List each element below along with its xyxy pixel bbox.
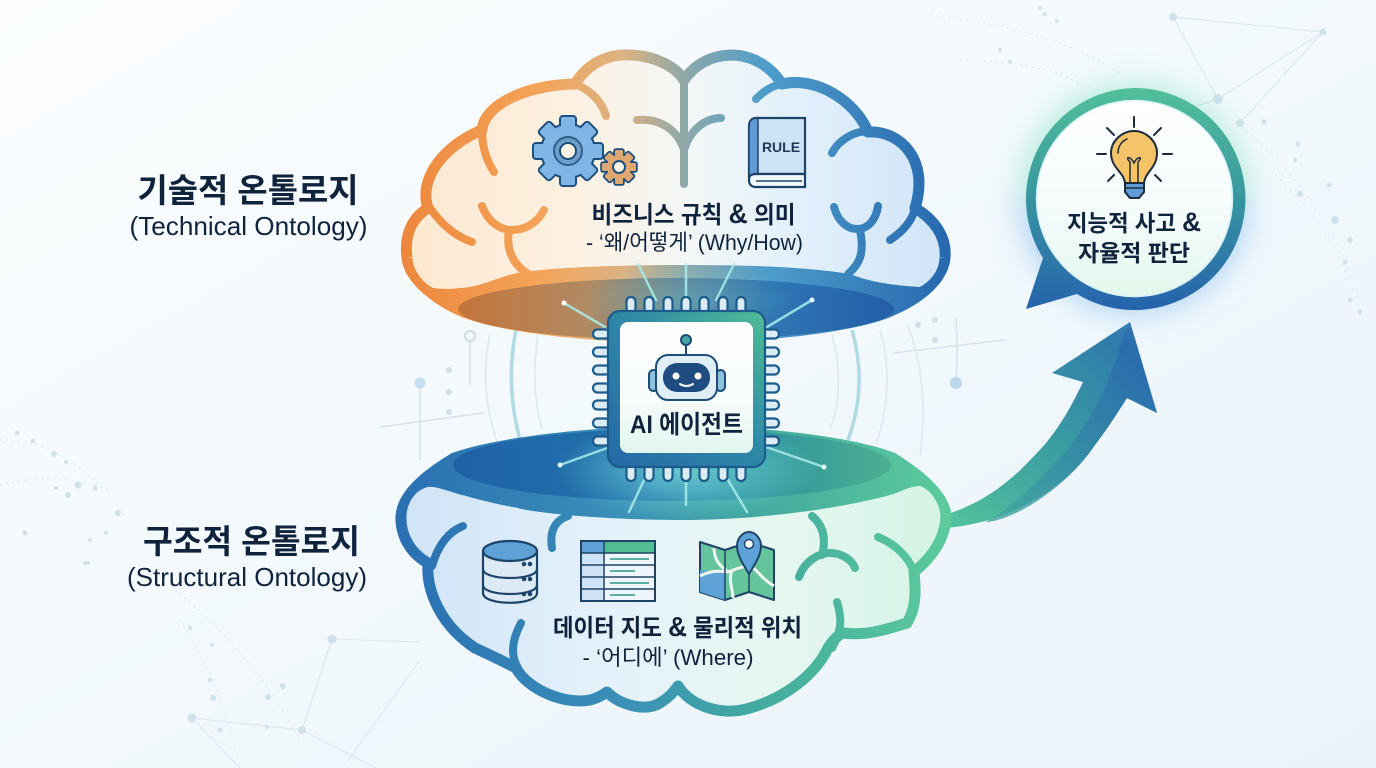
brain folds — [430, 80, 915, 274]
text: data map: - ‘어디에’ (Where) — [582, 645, 754, 670]
heading: technical ontology: 기술적 온톨로지 — [138, 172, 358, 209]
text: business rules — [586, 198, 803, 255]
energy glow and rays — [556, 264, 826, 520]
icon: light bulb — [1097, 117, 1172, 198]
cloud fill — [402, 482, 944, 711]
icon: data table — [581, 541, 655, 601]
cloud folds — [432, 516, 914, 668]
panel: structural ontology cloud — [396, 426, 952, 711]
text: business rules: 비즈니스 규칙 & 의미 — [592, 198, 795, 229]
rim — [396, 426, 952, 520]
text: business rules: - ‘왜/어떻게’ (Why/How) — [586, 230, 803, 255]
cloud outline — [401, 515, 946, 711]
chip: AI agent — [593, 297, 779, 481]
heading: structural ontology — [127, 523, 367, 592]
bubble — [1026, 88, 1245, 310]
brain outline — [406, 55, 945, 258]
icon: rule book: RULE — [762, 139, 800, 155]
rim — [402, 258, 950, 343]
chip pins — [593, 297, 779, 481]
callout: intelligent thinking: 자율적 판단 — [1078, 240, 1190, 266]
chip body — [608, 311, 765, 467]
icon: database — [483, 541, 537, 603]
text: data map: 데이터 지도 & 물리적 위치 — [553, 611, 802, 642]
concentric signal arcs — [380, 318, 1005, 460]
icon: gears — [534, 117, 636, 185]
callout glow — [1020, 84, 1248, 313]
panel: technical ontology brain — [402, 55, 950, 343]
dark portal disc — [453, 429, 891, 501]
dark portal disc — [458, 278, 894, 340]
arrow to thinking bubble — [945, 322, 1157, 528]
heading: technical ontology — [130, 172, 368, 241]
heading: technical ontology: (Technical Ontology) — [130, 211, 368, 241]
circuit nodes — [414, 317, 962, 415]
callout label: 지능적 사고 & — [1067, 207, 1201, 237]
icon: robot — [649, 335, 725, 400]
callout: intelligent thinking — [1020, 84, 1248, 313]
chip screen — [620, 322, 753, 453]
heading: structural ontology: 구조적 온톨로지 — [143, 523, 360, 560]
brain fill — [406, 55, 945, 300]
text: data map — [553, 611, 802, 670]
chip label: AI 에이전트 — [630, 411, 743, 439]
icon: rule book — [749, 118, 805, 187]
icon: map with pin — [700, 532, 774, 600]
heading: structural ontology: (Structural Ontology) — [127, 562, 367, 592]
